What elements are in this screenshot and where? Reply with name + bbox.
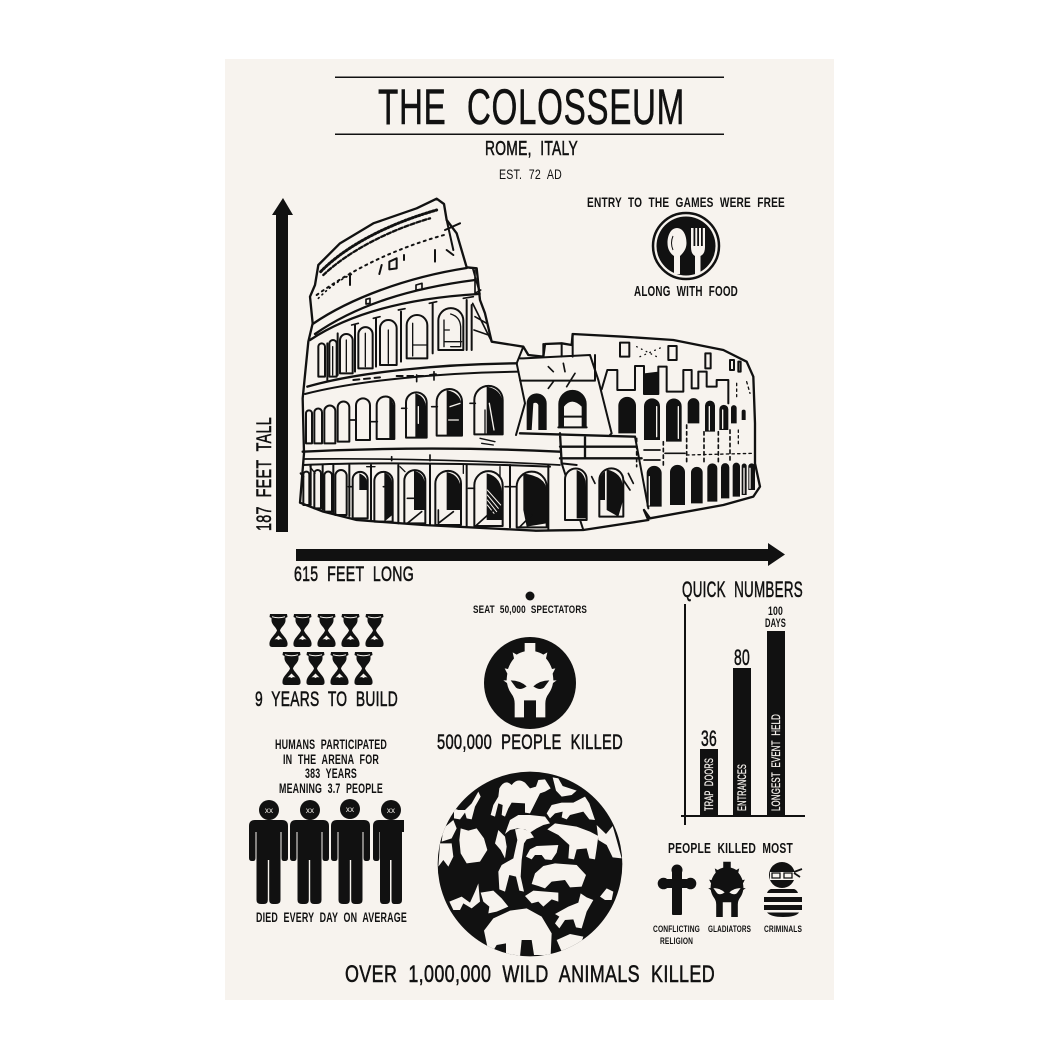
right side wall [602, 343, 755, 507]
icon: gladiator helmet [484, 637, 576, 729]
icon row: four figures: xx [346, 805, 354, 814]
callout: free entry and food [587, 194, 785, 300]
bar: entrances: 80 [734, 645, 750, 670]
stat: human deaths [249, 737, 407, 925]
middle tier [306, 386, 503, 445]
deaths caption: DIED EVERY DAY ON AVERAGE [256, 910, 407, 925]
icon: spoon and fork [653, 213, 719, 279]
years label: 9 YEARS TO BUILD [255, 688, 398, 711]
attic details [310, 210, 492, 342]
spectators label: SEAT 50,000 SPECTATORS [473, 604, 587, 616]
bar: trap doors [700, 726, 718, 816]
title block [335, 76, 724, 182]
bar: longest event [765, 604, 786, 816]
caption: wild animals: OVER 1,000,000 WILD ANIMALS KILLED [345, 961, 715, 988]
label: conflicting religion [653, 924, 700, 947]
icon row: hourglasses [269, 614, 384, 685]
length label: 615 FEET LONG [294, 563, 414, 586]
panel heading: PEOPLE KILLED MOST [668, 841, 793, 857]
chart heading: QUICK NUMBERS [682, 577, 803, 602]
deaths text [275, 737, 387, 796]
deaths text: 383 YEARS [305, 766, 357, 781]
bar: longest event: DAYS [765, 616, 786, 630]
bar chart: quick numbers [681, 577, 805, 825]
bar: longest event: LONGEST EVENT HELD [771, 714, 783, 811]
icon: helmet [708, 862, 746, 917]
deaths text: MEANING 3.7 PEOPLE [279, 781, 383, 796]
illustration: Colosseum [300, 199, 760, 531]
icon row: four figures [249, 799, 404, 904]
bar: longest event: 100 [768, 604, 783, 618]
icon row: four figures: xx [306, 806, 314, 815]
deaths text: HUMANS PARTICIPATED [275, 737, 387, 752]
label: gladiators: GLADIATORS [708, 924, 751, 935]
icon: criminal [764, 862, 802, 917]
bar: entrances [733, 645, 751, 816]
upper tier [318, 297, 473, 380]
icon: cross [658, 864, 696, 915]
deaths text: IN THE ARENA FOR [283, 752, 379, 767]
title: THE COLOSSEUM [378, 79, 685, 135]
icon row: four figures: xx [265, 806, 273, 815]
subtitle: established: EST. 72 AD [499, 166, 562, 182]
animal silhouettes circle [438, 772, 622, 957]
lower tier [301, 465, 548, 530]
height arrow with label [253, 198, 293, 532]
people killed label: 500,000 PEOPLE KILLED [437, 731, 623, 754]
bar: trap doors: 36 [701, 726, 717, 751]
height label: 187 FEET TALL [253, 417, 276, 531]
panel: people killed most [653, 841, 802, 947]
bands [303, 363, 560, 467]
label: conflicting religion: CONFLICTING [653, 924, 700, 935]
stat: people killed [437, 637, 623, 754]
subtitle: location: ROME, ITALY [485, 138, 578, 160]
length arrow with label [294, 543, 785, 586]
stat: spectators [473, 592, 587, 616]
bar: trap doors: TRAP DOORS [704, 758, 716, 811]
stat: years to build [255, 614, 398, 711]
label: criminals: CRIMINALS [764, 924, 802, 935]
central ruin [516, 334, 648, 531]
label: conflicting religion: RELIGION [660, 936, 693, 947]
callout heading: ENTRY TO THE GAMES WERE FREE [587, 194, 785, 210]
background panel [225, 59, 834, 1000]
bar: entrances: ENTRANCES [737, 764, 749, 811]
callout caption: ALONG WITH FOOD [634, 283, 738, 300]
icon row: four figures: xx [387, 806, 395, 815]
